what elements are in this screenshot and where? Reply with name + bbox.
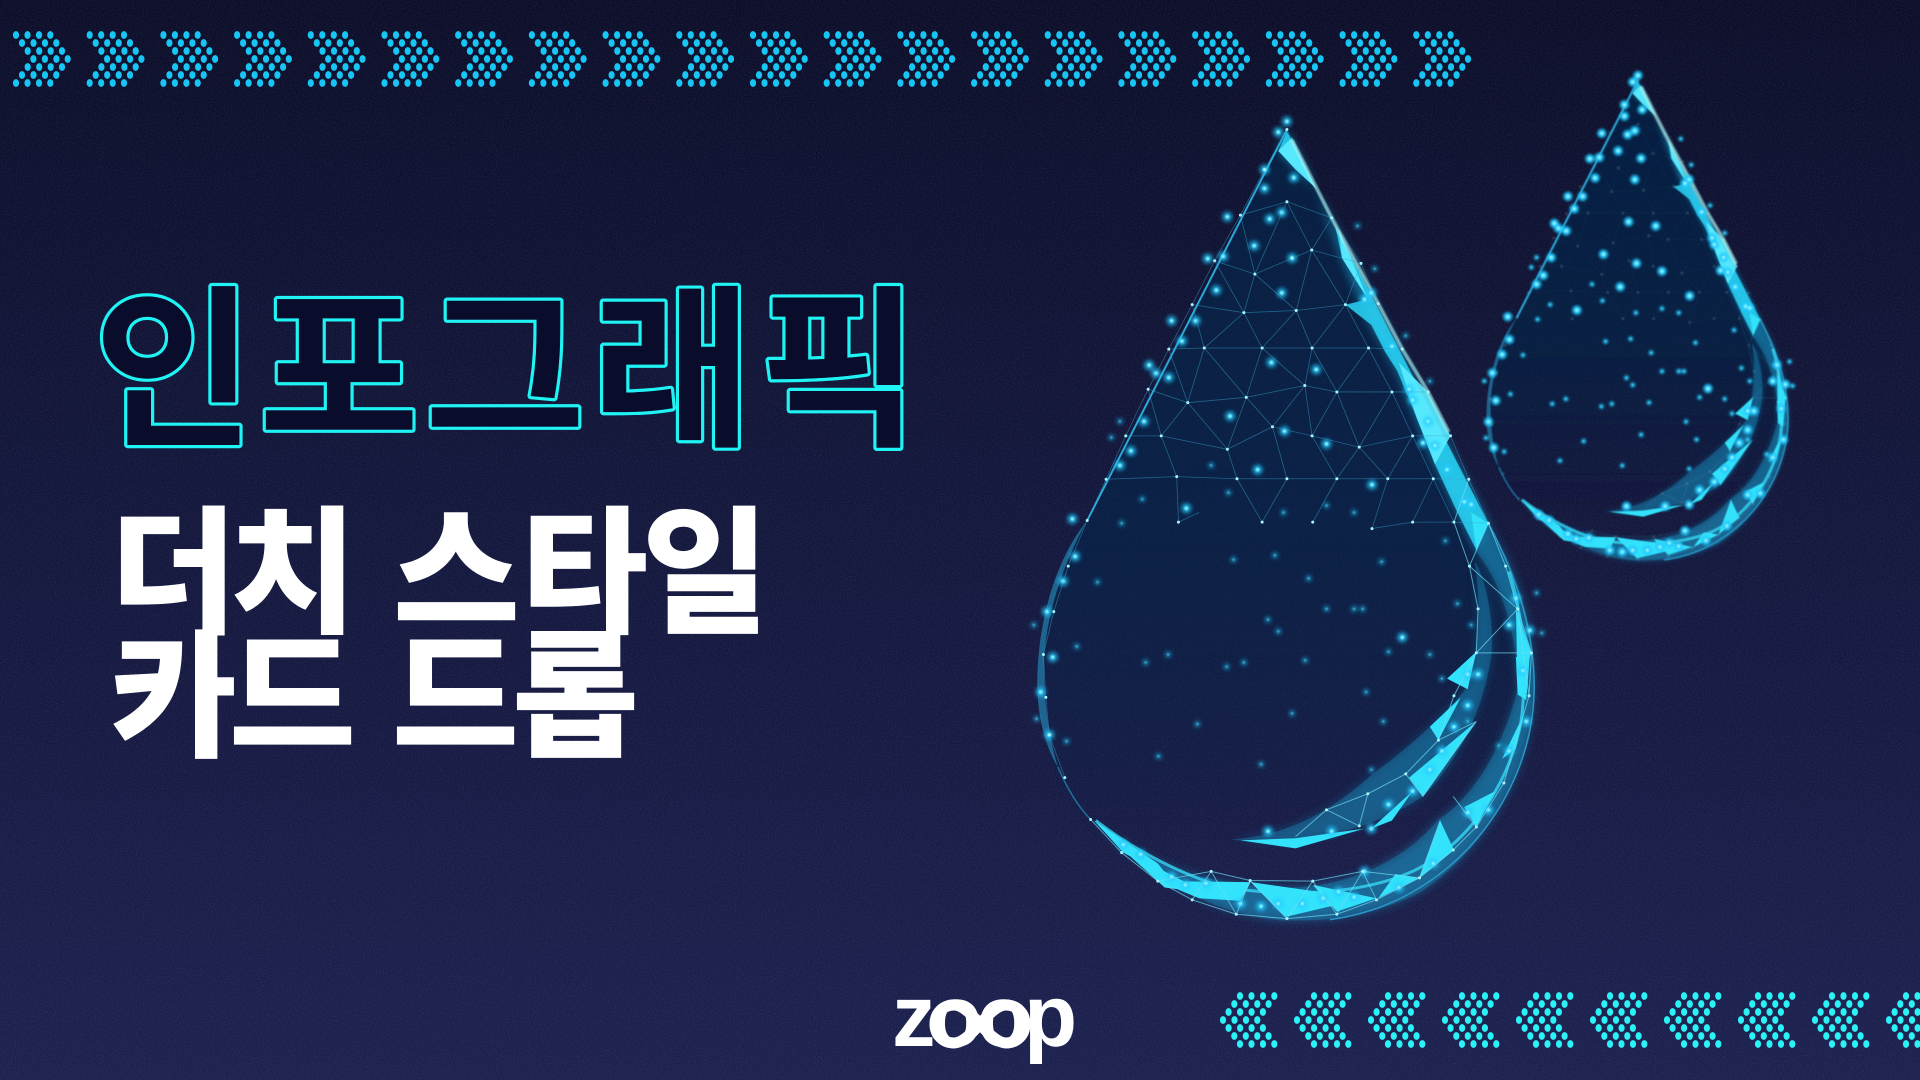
- logo: zoop: zoop: [892, 968, 1077, 1065]
- chevron row: bottom, pointing left: [1220, 992, 1920, 1048]
- title: outlined heading: 인포그래픽: [94, 274, 919, 469]
- subtitle: line two: 카드 드롭: [110, 622, 639, 776]
- chevron row: top, pointing right: [13, 31, 1471, 87]
- illustration: small water drop: [1484, 75, 1793, 561]
- title: outlined heading: 인포그래픽: [94, 274, 919, 469]
- illustration: large water drop: [1034, 121, 1542, 921]
- subtitle: line one: 더치 스타일: [110, 498, 769, 652]
